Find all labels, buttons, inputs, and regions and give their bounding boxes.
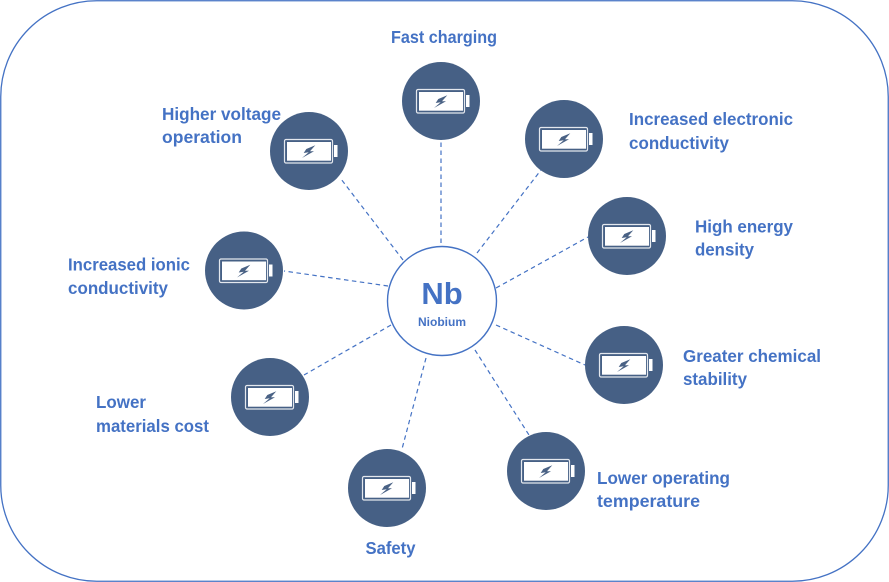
label: fast charging: Fast charging bbox=[391, 27, 497, 47]
label: greater chemical stability bbox=[683, 346, 821, 389]
label: lower materials cost: Lower bbox=[96, 392, 146, 412]
icon: battery, lower operating temperature bbox=[507, 432, 585, 510]
element symbol: Nb bbox=[421, 276, 463, 311]
label: increased electronic conductivity: conductivity bbox=[629, 133, 729, 153]
label: increased ionic conductivity bbox=[68, 254, 190, 298]
element name: Niobium bbox=[418, 315, 466, 329]
label: increased electronic conductivity: Increased electronic bbox=[629, 109, 793, 129]
label: higher voltage operation bbox=[162, 104, 281, 147]
label: lower operating temperature bbox=[597, 468, 730, 511]
icon: battery, high energy density bbox=[588, 197, 666, 275]
icon: battery, fast charging bbox=[402, 62, 480, 140]
icon: battery, increased electronic conductivity bbox=[525, 100, 603, 178]
label: greater chemical stability: Greater chemical bbox=[683, 346, 821, 366]
label: lower materials cost bbox=[96, 392, 209, 436]
icon: battery, lower materials cost bbox=[231, 358, 309, 436]
label: higher voltage operation: operation bbox=[162, 127, 242, 147]
label: increased ionic conductivity: Increased ionic bbox=[68, 254, 190, 274]
label: high energy density: High energy bbox=[695, 216, 793, 236]
label: high energy density: density bbox=[695, 240, 754, 260]
icon: battery, increased ionic conductivity bbox=[205, 232, 283, 310]
label: safety: Safety bbox=[366, 538, 416, 558]
label: high energy density bbox=[695, 216, 793, 260]
label: lower operating temperature: temperature bbox=[597, 491, 700, 511]
central Niobium circle bbox=[388, 246, 496, 356]
label: lower materials cost: materials cost bbox=[96, 416, 209, 436]
label: increased electronic conductivity bbox=[629, 109, 793, 153]
icon: battery, higher voltage operation bbox=[270, 112, 348, 190]
icon: battery, safety bbox=[348, 449, 426, 527]
label: increased ionic conductivity: conductivity bbox=[68, 278, 168, 298]
label: higher voltage operation: Higher voltage bbox=[162, 104, 281, 124]
label: greater chemical stability: stability bbox=[683, 369, 747, 389]
connector lines bbox=[284, 142, 588, 449]
icon: battery, greater chemical stability bbox=[585, 326, 663, 404]
label: lower operating temperature: Lower operating bbox=[597, 468, 730, 488]
